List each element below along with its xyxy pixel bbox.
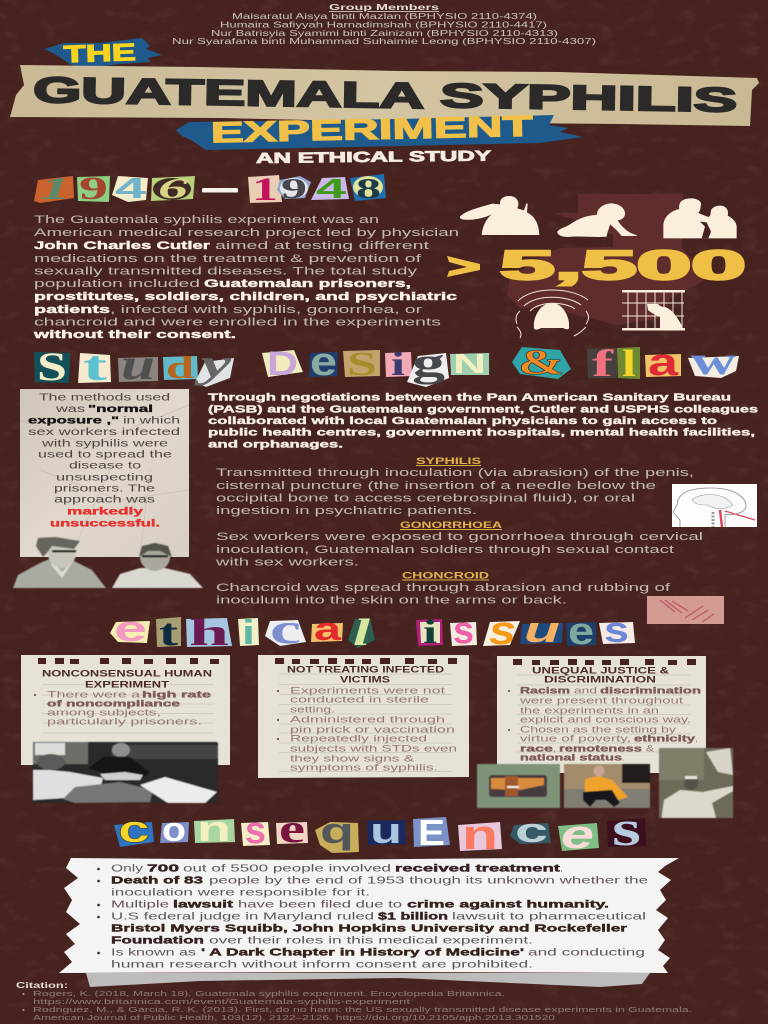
- negotiations paragraph: public health centres, government hospitals, mental health facilities,: [208, 428, 755, 438]
- section: syphilis: occipital bone to access cerebrospinal fluid), or oral: [216, 492, 635, 504]
- heading: consequences: s: [612, 800, 641, 856]
- note heading: UNEQUAL JUSTICE &: [532, 666, 670, 676]
- group members: Maisaratul Aisya binti Mazlan (BPHYSIO 2110-4374): [232, 12, 538, 21]
- intro paragraph: , infected with syphilis, gonorrhea, or: [110, 304, 423, 316]
- panel: normal exposure note: used to spread the: [38, 450, 173, 460]
- citations: Citation:: [16, 981, 68, 990]
- note text: There were a: [47, 690, 141, 700]
- heading: ethical issues: s: [489, 609, 516, 653]
- heading: consequences: q: [320, 810, 354, 851]
- heading: ethical issues: i: [242, 614, 255, 652]
- note heading: NOT TREATING INFECTED: [287, 664, 445, 674]
- negotiations paragraph: (PASB) and the Guatemalan government, Cutler and USPHS colleagues: [208, 404, 759, 416]
- heading: consequences: [114, 800, 646, 858]
- note text: national status: [520, 752, 622, 764]
- note text: [277, 686, 457, 774]
- note heading: DISCRIMINATION: [544, 674, 656, 684]
- citations: Rodriguez, M., & Garcia, R. K. (2013). First, do no harm: the US sexually transmitted disease experiments in Guatemala.: [33, 1005, 692, 1014]
- heading: 1946-1948: 1: [252, 172, 278, 208]
- intro paragraph: sexually transmitted diseases. The total study: [34, 266, 418, 278]
- intro paragraph: chancroid and were enrolled in the experiments: [34, 316, 442, 328]
- section: chancroid: CHONCROID: [402, 570, 489, 582]
- heading: 1946-1948: 9: [281, 173, 307, 205]
- title banner: guatemala syphilis: SYPHILIS: [440, 77, 737, 120]
- heading: 1946-1948: 4: [115, 173, 146, 205]
- diagram: cisternal puncture: [672, 484, 757, 527]
- icon: crawling child: [557, 203, 637, 237]
- panel: unequal justice and discrimination: [497, 654, 706, 773]
- citations: Rogers, K. (2018, March 18). Guatemala syphilis experiment. Encyclopedia Britannica.: [33, 989, 505, 998]
- intro paragraph: [32, 214, 459, 341]
- heading: study design & flaw: e: [310, 340, 337, 384]
- intro paragraph: medications on the treatment & prevention of: [34, 253, 423, 265]
- heading: 1946-1948: 1: [40, 170, 70, 206]
- heading: consequences: s: [245, 810, 266, 852]
- heading: ethical issues: u: [524, 609, 560, 650]
- photo: doctor and patient in ward: [33, 742, 218, 803]
- heading: 1946-1948: [34, 170, 386, 208]
- panel: consequences: [59, 858, 679, 987]
- icon: distressed person: [516, 290, 588, 338]
- title banner: guatemala syphilis: [10, 65, 759, 126]
- section: syphilis: ingestion in psychiatric patients.: [216, 505, 477, 517]
- note text: pin prick or vaccination: [290, 724, 455, 736]
- consequences list: received treatment: [395, 862, 561, 874]
- intro paragraph: Guatemalan prisoners,: [204, 278, 411, 290]
- heading: consequences: c: [515, 812, 548, 850]
- heading: study design & flaw: S: [347, 346, 377, 383]
- heading: consequences: e: [279, 806, 305, 851]
- title banner: the: THE: [63, 39, 136, 68]
- note text: particularly prisoners.: [47, 716, 202, 728]
- note heading: VICTIMS: [340, 674, 390, 684]
- title banner: experiment: EXPERIMENT: [210, 111, 534, 149]
- section: chancroid: [216, 570, 672, 606]
- note text: .: [622, 752, 625, 764]
- consequences list: [97, 862, 648, 970]
- heading: consequences: n: [462, 811, 498, 858]
- consequences list: $1 billion: [378, 910, 448, 922]
- group members: [172, 3, 597, 46]
- note text: high rate: [142, 690, 211, 700]
- intro paragraph: American medical research project led by physician: [34, 227, 459, 239]
- section: gonorrhoea: Sex workers were exposed to gonorrhoea through cervical: [216, 531, 703, 543]
- icon: adult pair: [663, 198, 737, 238]
- heading: study design & flaw: f: [592, 343, 615, 385]
- note text: were present throughout: [518, 696, 684, 706]
- consequences list: Foundation: [111, 934, 204, 946]
- heading: study design & flaw: a: [648, 342, 679, 384]
- heading: 1946-1948: 9: [79, 171, 108, 207]
- heading: ethical issues: s: [453, 610, 474, 652]
- heading: study design & flaw: i: [391, 346, 405, 383]
- icons: victims silhouettes: [460, 196, 737, 238]
- intro paragraph: aimed at testing different: [215, 240, 429, 252]
- title banner: experiment: [176, 111, 583, 150]
- note text: setting.: [290, 704, 335, 716]
- intro paragraph: prostitutes, soldiers, children, and psychiatric: [34, 291, 457, 303]
- panel: nonconsensual human experiment: [21, 653, 230, 765]
- icon: soldier saluting: [460, 196, 539, 235]
- heading: ethical issues: s: [604, 609, 629, 650]
- intro paragraph: without their consent.: [32, 329, 236, 341]
- heading: 1946-1948: 4: [316, 173, 347, 204]
- heading: study design & flaw: g: [412, 340, 445, 385]
- consequences list: people by the end of 1953 though its unknown whether the: [209, 874, 648, 886]
- consequences list: over their roles in this medical experiment.: [209, 934, 533, 946]
- heading: study design & flaw: u: [121, 340, 155, 389]
- heading: consequences: n: [197, 808, 231, 849]
- note text: they show signs &: [290, 754, 415, 764]
- group members: Humaira Safiyyah Harnadimshah (BPHYSIO 2110-4417): [220, 20, 548, 30]
- heading: study design & flaw: t: [83, 344, 107, 390]
- group members: Group Members: [329, 3, 440, 12]
- note heading: [532, 666, 670, 684]
- heading: study design & flaw: N: [453, 348, 486, 379]
- intro paragraph: John Charles Cutler: [34, 240, 211, 252]
- panel: normal exposure note: prisoners. The: [54, 484, 156, 494]
- panel: normal exposure note: approach was: [54, 494, 155, 506]
- negotiations paragraph: [208, 392, 759, 450]
- section: syphilis: cisternal puncture (the insertion of a needle below the: [216, 480, 656, 492]
- consequences list: out of 5500 people involved: [183, 862, 391, 874]
- note text: [34, 690, 211, 728]
- heading: ethical issues: e: [568, 611, 594, 653]
- panel: normal exposure note: was: [54, 404, 85, 415]
- citations: [16, 981, 692, 1022]
- note heading: [287, 664, 445, 684]
- consequences list: human research without inform consent are prohibited.: [111, 958, 533, 970]
- panel: normal exposure note: disease to: [69, 460, 142, 472]
- map of Guatemala: [507, 194, 707, 325]
- heading: ethical issues: t: [159, 612, 179, 654]
- heading: 1946-1948: 6: [158, 173, 189, 205]
- heading: ethical issues: [110, 607, 635, 654]
- consequences list: Bristol Myers Squibb, John Hopkins University and Rockefeller: [111, 922, 627, 934]
- note heading: [42, 668, 212, 690]
- section: gonorrhoea: with sex workers.: [214, 556, 359, 568]
- statistic: greater than 5,500: 5,500: [500, 242, 746, 288]
- note text: ,: [695, 734, 698, 744]
- note text: Administered through: [290, 714, 445, 726]
- photo: sepia doctor: [659, 748, 733, 818]
- consequences list: inoculation were responsible for it.: [111, 886, 370, 898]
- panel: normal exposure note: with syphilis were: [40, 438, 169, 450]
- heading: ethical issues: c: [270, 607, 301, 653]
- panel: normal exposure note: The methods used: [39, 392, 170, 404]
- note text: [508, 686, 701, 764]
- heading: consequences: e: [561, 813, 594, 857]
- note text: among subjects,: [47, 708, 161, 718]
- statistic: greater than 5,500: [447, 242, 746, 288]
- heading: ethical issues: h: [189, 612, 229, 654]
- consequences list: U.S federal judge in Maryland ruled: [111, 910, 374, 922]
- panel: normal exposure note: unsuspecting: [56, 472, 153, 484]
- consequences list: ' A Dark Chapter in History of Medicine': [201, 946, 524, 958]
- note text: &: [646, 744, 655, 754]
- panel: normal exposure note: sex workers infected: [28, 427, 180, 438]
- section: syphilis: SYPHILIS: [416, 456, 481, 467]
- intro paragraph: The Guatemala syphilis experiment was an: [34, 214, 379, 226]
- panel: normal exposure note: markedly: [67, 506, 144, 518]
- heading: consequences: E: [418, 812, 445, 853]
- consequences list: 700: [147, 862, 179, 874]
- note text: Experiments were not: [290, 686, 446, 696]
- note text: Racism: [520, 686, 570, 696]
- photo: medical slide: [477, 764, 560, 808]
- note text: ,: [553, 744, 556, 754]
- negotiations paragraph: and orphanages.: [208, 440, 343, 450]
- heading: consequences: o: [162, 811, 186, 849]
- citations: https://www.britannica.com/event/Guatemala-syphilis-experiment: [33, 997, 412, 1006]
- note text: conducted in sterile: [290, 694, 429, 706]
- consequences list: have been filed due to: [238, 898, 402, 910]
- note text: explicit and conscious way.: [520, 714, 691, 726]
- heading: consequences: u: [370, 810, 402, 851]
- consequences list: and conducting: [528, 946, 645, 958]
- consequences list: Is known as: [111, 946, 196, 958]
- heading: study design & flaw: &: [518, 342, 564, 382]
- group members: Nur Syarafana binti Muhammad Suhaimie Leong (BPHYSIO 2110-4307): [172, 37, 597, 46]
- photo: elderly survivor: [564, 764, 650, 808]
- heading: study design & flaw: [34, 338, 739, 390]
- heading: study design & flaw: D: [267, 345, 298, 383]
- intro paragraph: patients: [34, 304, 110, 316]
- note text: the experiments in an: [520, 706, 659, 716]
- photo: skin abrasion: [647, 596, 724, 624]
- note text: ethnicity: [634, 734, 696, 744]
- note text: virtue of poverty,: [520, 734, 631, 744]
- note text: of noncompliance: [47, 698, 180, 710]
- section: chancroid: Chancroid was spread through abrasion and rubbing of: [216, 582, 672, 594]
- consequences list: Only: [111, 862, 144, 874]
- heading: ethical issues: e: [114, 608, 147, 649]
- title banner: the: [44, 38, 162, 69]
- section: chancroid: inoculum into the skin on the arms or back.: [216, 594, 567, 606]
- icon: prisoner behind bars: [622, 290, 685, 330]
- note text: Repeatedly injected: [290, 734, 427, 744]
- note text: remoteness: [559, 744, 642, 754]
- consequences list: Death of 83: [111, 874, 203, 886]
- heading: 1946-1948: 8: [356, 173, 381, 205]
- note text: symptoms of syphilis.: [290, 762, 438, 774]
- heading: study design & flaw: y: [194, 341, 231, 386]
- heading: study design & flaw: l: [622, 343, 636, 385]
- panel: normal exposure note: "normal: [88, 404, 153, 415]
- consequences list: .: [560, 862, 563, 874]
- consequences list: Multiple: [111, 898, 169, 910]
- negotiations paragraph: Through negotiations between the Pan American Sanitary Bureau: [208, 392, 731, 404]
- note text: Chosen as the setting by: [520, 724, 676, 736]
- panel: normal exposure note: [20, 389, 189, 557]
- consequences list: crime against humanity.: [407, 898, 609, 910]
- heading: study design & flaw: w: [691, 338, 736, 383]
- note text: and: [574, 686, 597, 696]
- heading: ethical issues: a: [314, 611, 341, 647]
- panel: normal exposure note: exposure ,": [28, 416, 119, 426]
- panel: normal exposure note: unsuccessful.: [50, 518, 160, 530]
- section: syphilis: [216, 456, 694, 517]
- group members: Nur Batrisyia Syamimi binti Zainizam (BPHYSIO 2110-4313): [211, 29, 559, 38]
- photo: two women with censored eyes: [13, 537, 203, 588]
- panel: normal exposure note: in which: [123, 416, 180, 426]
- heading: ethical issues: i: [423, 614, 437, 651]
- title banner: guatemala syphilis: GUATEMALA: [33, 69, 424, 116]
- note text: subjects with STDs even: [290, 744, 457, 754]
- note heading: EXPERIMENT: [85, 680, 170, 690]
- note heading: NONCONSENSUAL HUMAN: [42, 668, 212, 678]
- section: gonorrhoea: GONORRHOEA: [400, 520, 502, 531]
- citations: American Journal of Public Health, 103(12), 2122–2126. https://doi.org/10.2105/ajph.2013.301520: [33, 1013, 555, 1022]
- consequences list: lawsuit: [173, 898, 234, 910]
- section: gonorrhoea: [214, 520, 703, 568]
- note text: race: [520, 744, 553, 754]
- section: gonorrhoea: inoculation, Guatemalan soldiers through sexual contact: [216, 544, 674, 556]
- intro paragraph: population included: [34, 278, 200, 290]
- heading: consequences: c: [118, 809, 150, 851]
- subtitle: AN ETHICAL STUDY: [256, 149, 492, 167]
- panel: not treating infected victims: [258, 653, 469, 778]
- note text: discrimination: [600, 686, 701, 696]
- consequences list: lawsuit to pharmaceutical: [452, 910, 646, 922]
- heading: study design & flaw: S: [37, 344, 67, 389]
- negotiations paragraph: collaborated with local Guatemalan physicians to gain access to: [208, 416, 717, 427]
- heading: ethical issues: l: [353, 612, 371, 654]
- section: syphilis: Transmitted through inoculation (via abrasion) of the penis,: [216, 467, 694, 479]
- heading: study design & flaw: d: [166, 349, 194, 385]
